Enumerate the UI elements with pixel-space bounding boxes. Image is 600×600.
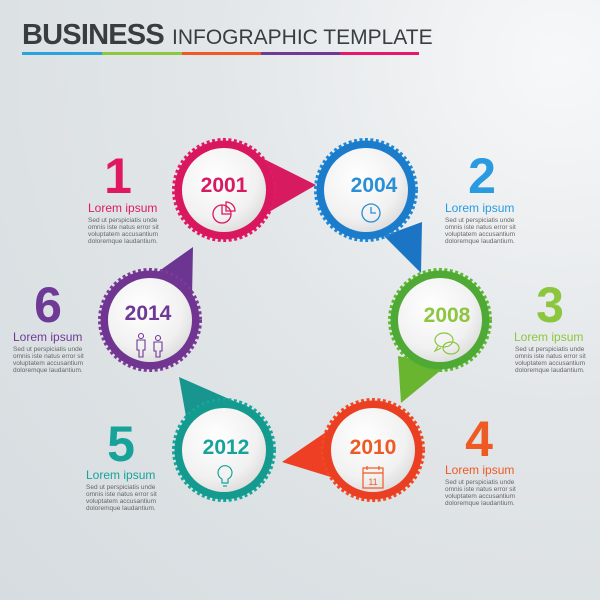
text block 6	[13, 277, 84, 374]
text block 6: voluptatem accusantium	[13, 360, 83, 367]
text block 6: Sed ut perspiciatis unde	[13, 346, 83, 353]
gear: 2001: 2001	[201, 174, 248, 197]
arrow: 2014 to 2001	[152, 247, 193, 298]
text block 1: Lorem ipsum	[88, 201, 157, 215]
text block 1: Sed ut perspiciatis unde	[88, 217, 158, 224]
text block 6: 6	[34, 277, 62, 333]
text block 4: voluptatem accusantium	[445, 493, 515, 500]
arrow: 2004 to 2008	[384, 222, 422, 273]
text block 4: 4	[465, 411, 493, 467]
text block 1: omnis iste natus error sit	[88, 224, 159, 231]
icon: speech bubbles	[435, 333, 459, 354]
gear: 2004	[316, 140, 416, 240]
text block 6: Lorem ipsum	[13, 330, 82, 344]
text block 5: Sed ut perspiciatis unde	[86, 484, 156, 491]
text block 3: doloremque laudantium.	[515, 367, 585, 374]
text block 2	[445, 148, 516, 245]
icon: pie chart	[213, 202, 235, 223]
text block 3: omnis iste natus error sit	[515, 353, 586, 360]
text block 6: omnis iste natus error sit	[13, 353, 84, 360]
icon: people	[137, 334, 162, 357]
text block 4: omnis iste natus error sit	[445, 486, 516, 493]
gear: 2012: 2012	[203, 436, 249, 459]
text block 2: Lorem ipsum	[445, 201, 514, 215]
text block 3: 3	[536, 277, 564, 333]
text block 3: Sed ut perspiciatis unde	[515, 346, 585, 353]
text block 1	[88, 148, 159, 245]
gear: 2004: 2004	[351, 174, 398, 197]
text block 6: doloremque laudantium.	[13, 367, 83, 374]
icon: light bulb	[218, 466, 232, 486]
arrow: 2012 to 2014	[179, 377, 236, 428]
arrow: 2010 to 2012	[282, 428, 334, 478]
text block 2: omnis iste natus error sit	[445, 224, 516, 231]
text block 4: Lorem ipsum	[445, 463, 514, 477]
text block 2: doloremque laudantium.	[445, 238, 515, 245]
title	[22, 19, 433, 55]
gear: 2014: 2014	[125, 302, 172, 325]
text block 5: Lorem ipsum	[86, 468, 155, 482]
title: BUSINESS	[22, 19, 164, 51]
icon: clock	[362, 204, 380, 222]
text block 4: doloremque laudantium.	[445, 500, 515, 507]
arrow: 2008 to 2010	[398, 356, 446, 403]
text block 1: voluptatem accusantium	[88, 231, 158, 238]
gear: 2001	[174, 140, 274, 240]
text block 3: voluptatem accusantium	[515, 360, 585, 367]
text block 1: doloremque laudantium.	[88, 238, 158, 245]
text block 3: Lorem ipsum	[514, 330, 583, 344]
text block 2: 2	[468, 148, 496, 204]
gear: 2012	[174, 400, 274, 500]
text block 5: voluptatem accusantium	[86, 498, 156, 505]
title: INFOGRAPHIC TEMPLATE	[172, 26, 433, 49]
gear: 2010	[322, 400, 424, 500]
text block 5: doloremque laudantium.	[86, 505, 156, 512]
gear: 2014	[100, 270, 200, 370]
text block 2: Sed ut perspiciatis unde	[445, 217, 515, 224]
gear: 2008: 2008	[424, 304, 471, 327]
text block 3	[514, 277, 586, 374]
gear: 2008	[390, 270, 490, 370]
text block 5: 5	[107, 416, 135, 472]
text block 2: voluptatem accusantium	[445, 231, 515, 238]
text block 5	[86, 416, 157, 512]
text block 1: 1	[104, 148, 132, 204]
text block 4: Sed ut perspiciatis unde	[445, 479, 515, 486]
arrow: 2001 to 2004	[258, 156, 316, 216]
icon: calendar: 11	[368, 477, 378, 487]
text block 5: omnis iste natus error sit	[86, 491, 157, 498]
text block 4	[445, 411, 516, 507]
gear: 2010: 2010	[350, 436, 396, 459]
